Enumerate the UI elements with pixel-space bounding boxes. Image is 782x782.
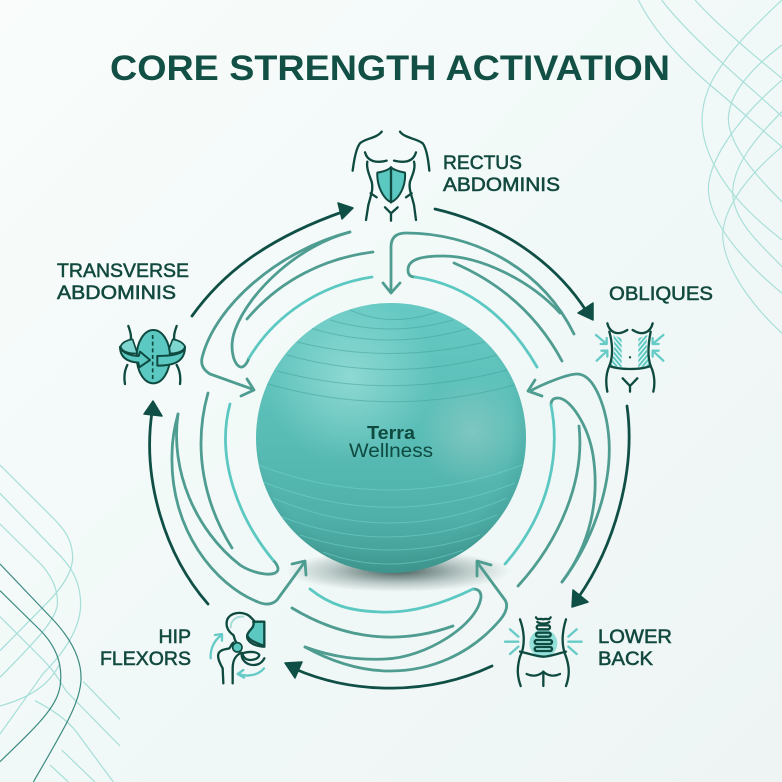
icon: lower back spine [505, 617, 582, 686]
label: hip flexors: FLEXORS [100, 648, 191, 670]
decorative wave lines: bottom left [0, 465, 120, 782]
ball brand: Wellness: Wellness [349, 441, 433, 462]
decorative wave lines: top right [638, 0, 782, 333]
label: rectus abdominis: ABDOMINIS [443, 174, 560, 196]
icon: transverse abdominis core wrap [120, 326, 185, 384]
icon: rectus abdominis torso [353, 132, 429, 221]
label: rectus abdominis: RECTUS [443, 152, 522, 174]
inner arrow set: bottom left [172, 393, 306, 604]
label: lower back: LOWER [598, 626, 672, 648]
title: CORE STRENGTH ACTIVATION [110, 49, 670, 88]
label: lower back: BACK [598, 648, 653, 670]
exercise ball [256, 303, 526, 573]
label: obliques: OBLIQUES [609, 283, 713, 305]
inner arrow set: top right [383, 233, 574, 367]
icon: obliques waist [596, 323, 663, 392]
icon: hip flexors pelvis [211, 613, 264, 683]
label: transverse abdominis: ABDOMINIS [57, 282, 176, 304]
outer arrow: to lower back [572, 406, 629, 607]
outer arrow: to obliques [435, 209, 593, 320]
outer arrow: to transverse abdominis [144, 401, 208, 604]
inner arrow set: right [505, 374, 609, 586]
ball brand: Terra: Terra [367, 423, 416, 443]
inner arrow set: top left [202, 232, 373, 396]
ball shadow [286, 550, 510, 592]
outer arrow: to hip flexors [285, 662, 492, 688]
inner arrow set: bottom [292, 561, 507, 671]
label: transverse abdominis: TRANSVERSE [57, 260, 189, 282]
outer arrow: to rectus abdominis [192, 203, 353, 316]
label: hip flexors: HIP [158, 626, 191, 648]
